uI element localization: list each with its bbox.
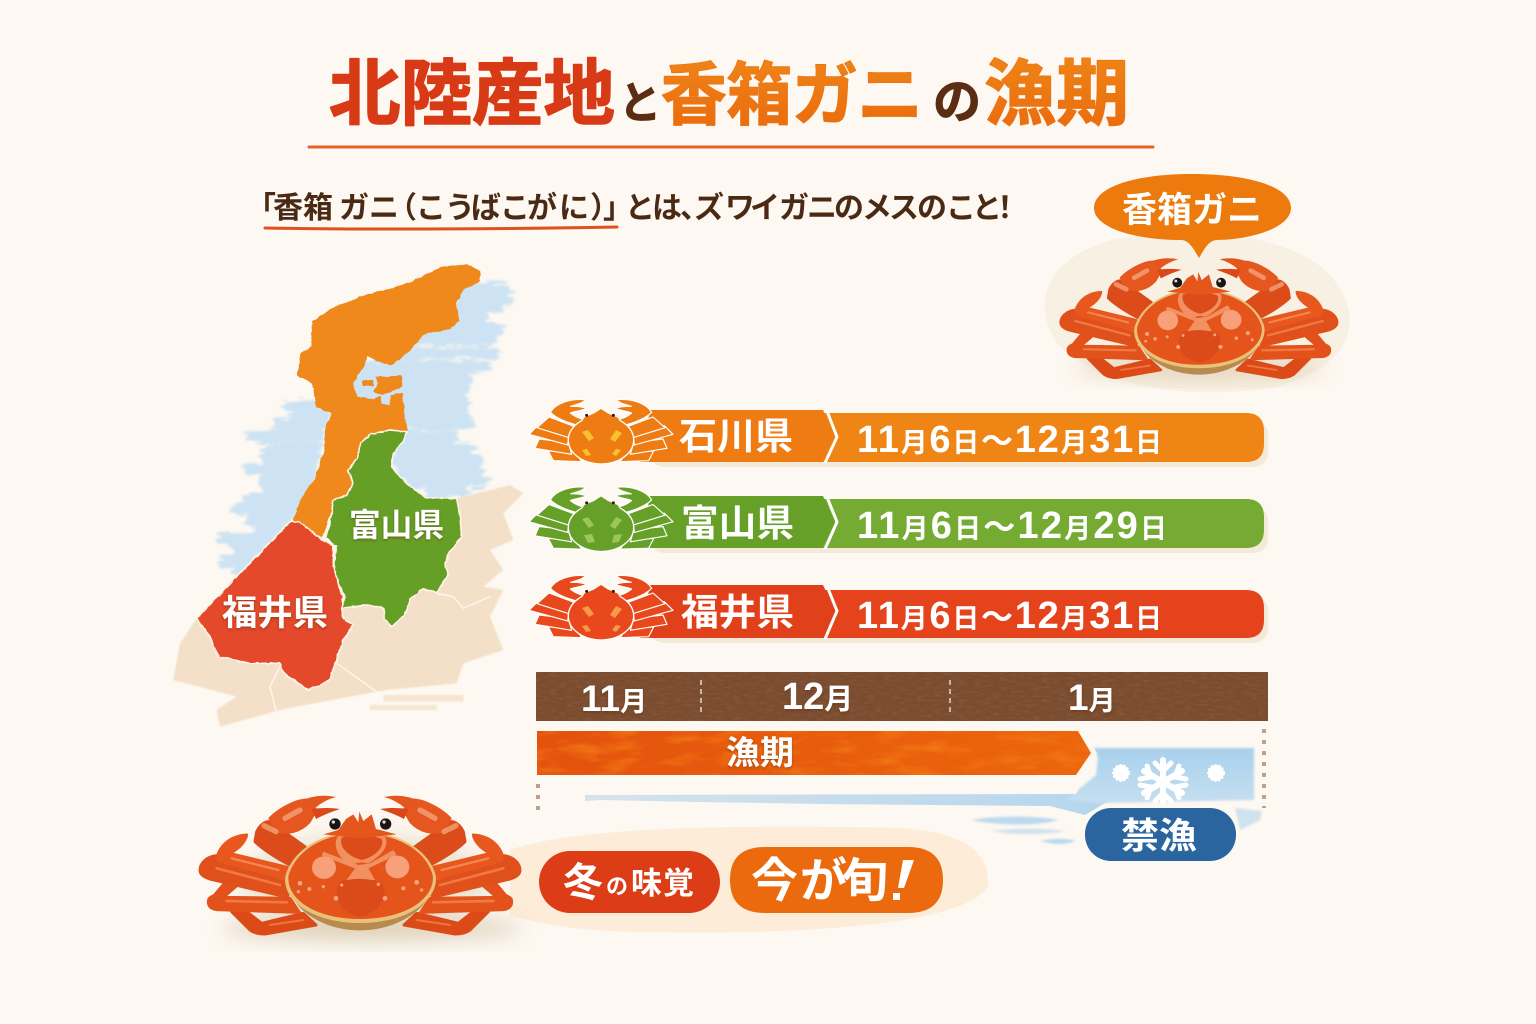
crab icon	[529, 399, 673, 464]
label: 漁期	[726, 734, 794, 771]
title: 北陸産地	[329, 55, 615, 135]
land wash	[173, 485, 523, 727]
title: 香箱ガニ	[661, 58, 923, 134]
backdrop blob	[1045, 233, 1350, 392]
large crab ground shadow	[222, 834, 522, 940]
month: January: 1月	[1068, 677, 1116, 718]
pill: in season now: 今が旬	[751, 854, 888, 907]
row shadow	[650, 596, 1268, 643]
drifting water marks	[971, 808, 1262, 844]
icon spots	[582, 430, 622, 456]
title: と	[619, 79, 661, 128]
land boundary lines	[270, 593, 490, 713]
row: Toyama season	[529, 487, 1268, 553]
exclamation mark	[893, 860, 914, 900]
Ishikawa prefecture	[293, 265, 480, 537]
Toyama prefecture	[325, 430, 462, 627]
header tab	[640, 496, 835, 548]
crab icon	[529, 575, 673, 640]
pill: winter delicacy: 味覚	[631, 866, 694, 901]
dotted guides	[538, 729, 1264, 812]
pill: in season now	[730, 847, 943, 913]
pill: winter delicacy: の	[606, 874, 628, 899]
title: の	[933, 76, 981, 129]
dates: 11月6日～12月31日	[857, 595, 1162, 637]
map label: Fukui: 福井県	[222, 594, 328, 633]
header tab	[640, 585, 835, 638]
icon: small snow dot right	[1208, 765, 1224, 781]
month header bar	[536, 672, 1268, 721]
dates: 11月6日～12月29日	[857, 505, 1167, 547]
sea wash	[223, 288, 508, 572]
prefecture label: 富山県	[681, 503, 794, 544]
chevron	[825, 411, 837, 463]
map of Hokuriku	[173, 265, 523, 727]
water streak	[585, 794, 1110, 815]
title underline	[309, 146, 1153, 148]
bubble label: 香箱ガニ	[1122, 191, 1262, 230]
dates: 11月6日～12月31日	[857, 419, 1162, 461]
arrow body	[537, 731, 1091, 775]
prefecture label: 福井県	[681, 592, 794, 633]
row: Fukui season	[529, 575, 1268, 643]
fishing season arrow	[537, 727, 1097, 794]
icon: small snow dot left	[1113, 765, 1129, 781]
icon spots	[582, 517, 622, 543]
title	[329, 55, 1129, 135]
date bar	[820, 499, 1264, 548]
crab illustration	[1061, 258, 1337, 378]
crab icon	[529, 487, 673, 551]
date bar	[820, 413, 1264, 462]
Fukui prefecture	[197, 522, 353, 690]
pill: winter delicacy	[539, 851, 720, 913]
subtitle underline	[265, 227, 617, 229]
icon spots	[582, 606, 622, 632]
prefecture label: 石川県	[679, 416, 793, 457]
chevron	[825, 497, 837, 549]
month: November: 11月	[581, 678, 647, 719]
bottom banner wash	[510, 827, 988, 932]
row shadow	[650, 506, 1268, 553]
pill: winter delicacy: 冬	[563, 861, 603, 905]
icon: snowflake	[1140, 760, 1186, 802]
date bar	[820, 590, 1264, 638]
title: 漁期	[984, 55, 1129, 135]
speech bubble	[1094, 174, 1291, 258]
arrow white edge	[1060, 727, 1097, 794]
closed season badge	[1085, 808, 1236, 861]
crab shadow	[1075, 358, 1325, 378]
map label: Toyama: 富山県	[349, 507, 444, 543]
subtitle: 「香箱ガニ（こうばこがに）」とは、ズワイガニのメスのこと！	[246, 191, 1020, 225]
row: Ishikawa season	[529, 399, 1268, 467]
month: December: 12月	[782, 676, 853, 718]
large crab illustration	[200, 796, 520, 934]
closed season badge: 禁漁	[1121, 815, 1197, 856]
row shadow	[650, 420, 1268, 467]
callout: kobako crab	[1045, 174, 1350, 392]
closed season wash	[1066, 748, 1254, 803]
chevron	[825, 586, 837, 639]
header tab	[640, 410, 835, 462]
